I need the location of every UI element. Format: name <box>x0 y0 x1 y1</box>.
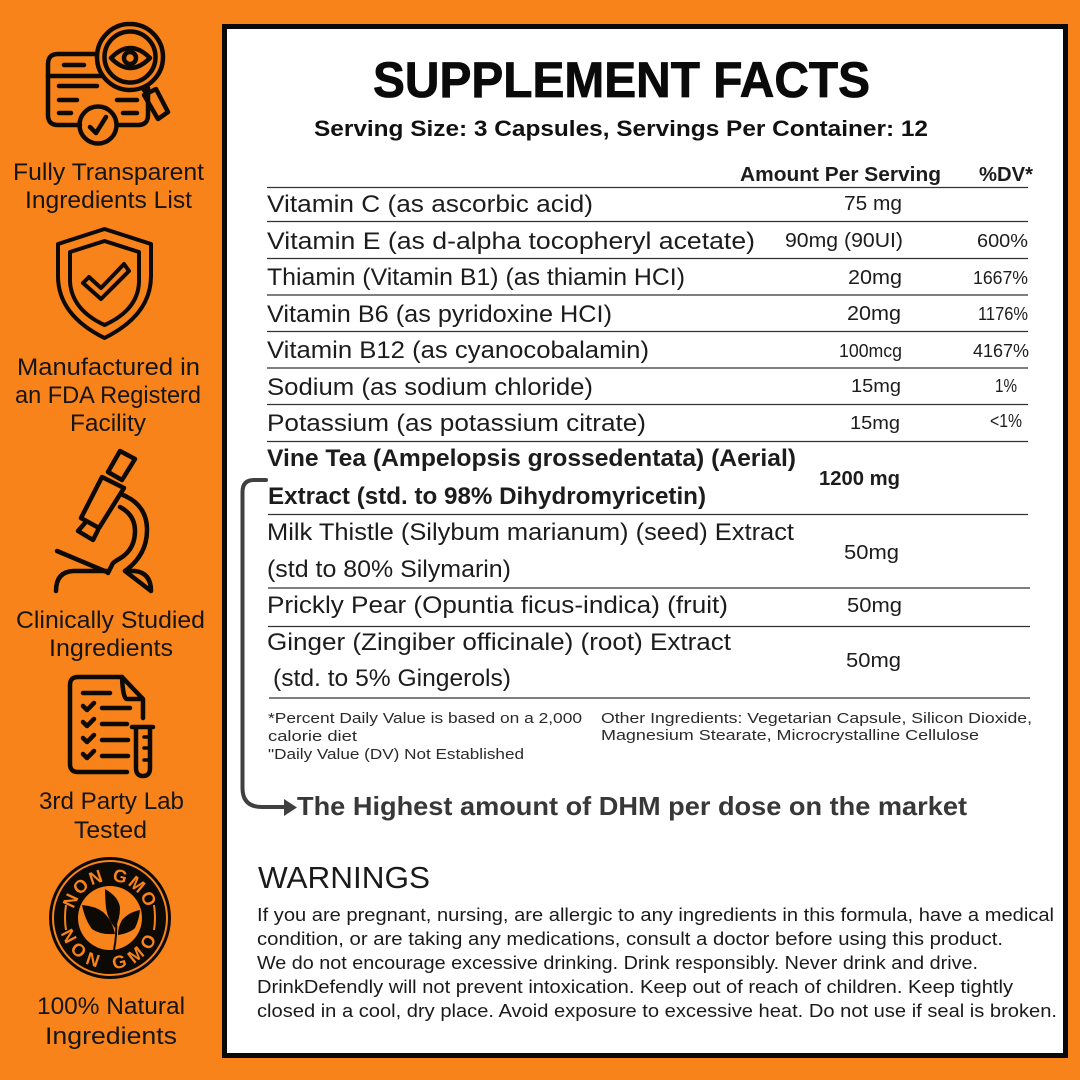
row: sodium <box>267 374 1017 401</box>
row: prickly pear <box>267 592 902 619</box>
row: thiamin: 20mg <box>848 267 902 289</box>
row: ginger <box>267 629 901 692</box>
row: vitamin b6: 1176% <box>978 304 1028 324</box>
icon: shield with check <box>58 229 151 338</box>
row: milk thistle: (std to 80% Silymarin) <box>267 556 511 583</box>
footnote: daily value: "Daily Value (DV) Not Established <box>268 746 524 763</box>
row: vitamin b12: Vitamin B12 (as cyanocobalamin) <box>267 337 649 364</box>
label: clinically studied ingredients <box>16 607 205 662</box>
icon: checklist with test tube <box>70 677 153 776</box>
row: milk thistle <box>267 519 899 583</box>
icon: microscope <box>56 451 151 591</box>
warnings text <box>257 904 1057 1021</box>
label: fully transparent ingredients list: Fully Transparent <box>13 159 204 186</box>
row: vine tea: Extract (std. to 98% Dihydromyricetin) <box>268 483 706 510</box>
label: manufactured in an fda registerd facility: Facility <box>70 410 146 437</box>
row: thiamin <box>267 264 1028 291</box>
row: vitamin b12: 100mcg <box>839 341 902 361</box>
row: vitamin e <box>267 228 1028 255</box>
warnings text: We do not encourage excessive drinking. Drink responsibly. Never drink and drive. <box>257 952 978 973</box>
row: vitamin e: 90mg (90UI) <box>785 230 903 252</box>
label: clinically studied ingredients: Ingredients <box>49 635 173 662</box>
table header <box>740 164 1033 186</box>
table header: %DV* <box>979 164 1033 186</box>
icon: non gmo badge: NON GMO <box>61 928 155 968</box>
row: thiamin: Thiamin (Vitamin B1) (as thiamin HCI) <box>267 264 685 291</box>
icon: document with magnifier <box>48 24 168 144</box>
label: 100% natural ingredients <box>37 993 185 1050</box>
row: vitamin c: Vitamin C (as ascorbic acid) <box>267 191 593 218</box>
row: vitamin e: 600% <box>977 231 1028 251</box>
row: milk thistle: 50mg <box>844 542 899 564</box>
title: SUPPLEMENT FACTS <box>373 52 870 108</box>
row: potassium: Potassium (as potassium citrate) <box>267 410 646 437</box>
label: fully transparent ingredients list: Ingredients List <box>25 187 192 214</box>
footnote: other ingredients <box>601 710 1032 744</box>
row: vitamin b12: 4167% <box>973 341 1029 361</box>
row: vine tea: 1200 mg <box>819 468 900 490</box>
label: 3rd party lab tested: 3rd Party Lab <box>39 788 184 815</box>
row: sodium: 1% <box>995 376 1017 396</box>
row: ginger: 50mg <box>846 650 901 672</box>
row: thiamin: 1667% <box>973 268 1028 288</box>
label: 100% natural ingredients: Ingredients <box>45 1023 177 1050</box>
warnings text: If you are pregnant, nursing, are allergic to any ingredients in this formula, have a medical <box>257 904 1054 925</box>
row: vitamin c <box>267 191 902 218</box>
label: manufactured in an fda registerd facility: an FDA Registerd <box>15 382 201 409</box>
footnote: other ingredients: Magnesium Stearate, Microcrystalline Cellulose <box>601 727 979 744</box>
row: potassium: <1% <box>990 411 1022 431</box>
row: ginger: Ginger (Zingiber officinale) (root) Extract <box>267 629 731 656</box>
row: vitamin e: Vitamin E (as d-alpha tocopheryl acetate) <box>267 228 755 255</box>
footnote: other ingredients: Other Ingredients: Vegetarian Capsule, Silicon Dioxide, <box>601 710 1032 727</box>
row: vitamin b12 <box>267 337 1029 364</box>
footnote: daily value: calorie diet <box>268 728 358 745</box>
arrow: bracket to callout <box>242 480 297 816</box>
row: vitamin b6 <box>267 301 1028 328</box>
label: 3rd party lab tested <box>39 788 184 844</box>
footnote: daily value <box>268 710 582 763</box>
warnings text: closed in a cool, dry place. Avoid exposure to excessive heat. Do not use if seal is broken. <box>257 1000 1057 1021</box>
row: vine tea: Vine Tea (Ampelopsis grossedentata) (Aerial) <box>267 445 796 472</box>
row: ginger: (std. to 5% Gingerols) <box>273 665 511 692</box>
row: potassium <box>267 410 1022 437</box>
warnings text: condition, or are taking any medications, consult a doctor before using this product. <box>257 928 1003 949</box>
warnings text: DrinkDefendly will not prevent intoxication. Keep out of reach of children. Keep tightly <box>257 976 1014 997</box>
row: vitamin b6: 20mg <box>847 303 901 325</box>
label: clinically studied ingredients: Clinically Studied <box>16 607 205 634</box>
row: milk thistle: Milk Thistle (Silybum marianum) (seed) Extract <box>267 519 794 546</box>
label: 3rd party lab tested: Tested <box>74 817 147 844</box>
icon: non gmo badge: NON GMO <box>62 870 156 908</box>
icon: non gmo badge <box>49 857 171 979</box>
row: sodium: 15mg <box>851 376 901 396</box>
row: vitamin c: 75 mg <box>844 193 902 215</box>
row: potassium: 15mg <box>850 413 900 433</box>
label: fully transparent ingredients list <box>13 159 204 214</box>
serving size: Serving Size: 3 Capsules, Servings Per Container: 12 <box>314 116 928 141</box>
row: prickly pear: 50mg <box>847 595 902 617</box>
table dividers <box>267 188 1030 698</box>
row: sodium: Sodium (as sodium chloride) <box>267 374 593 401</box>
row: vitamin b6: Vitamin B6 (as pyridoxine HCI) <box>267 301 612 328</box>
row: vine tea <box>267 445 900 510</box>
table header: Amount Per Serving <box>740 164 941 186</box>
panel: supplement facts <box>224 26 1066 1056</box>
label: manufactured in an fda registerd facility <box>15 354 201 437</box>
footnote: daily value: *Percent Daily Value is based on a 2,000 <box>268 710 582 727</box>
label: manufactured in an fda registerd facility: Manufactured in <box>17 354 200 381</box>
row: prickly pear: Prickly Pear (Opuntia ficus-indica) (fruit) <box>267 592 728 619</box>
label: 100% natural ingredients: 100% Natural <box>37 993 185 1020</box>
warnings heading: WARNINGS <box>258 860 430 895</box>
callout: highest amount of dhm: The Highest amount of DHM per dose on the market <box>297 791 967 821</box>
